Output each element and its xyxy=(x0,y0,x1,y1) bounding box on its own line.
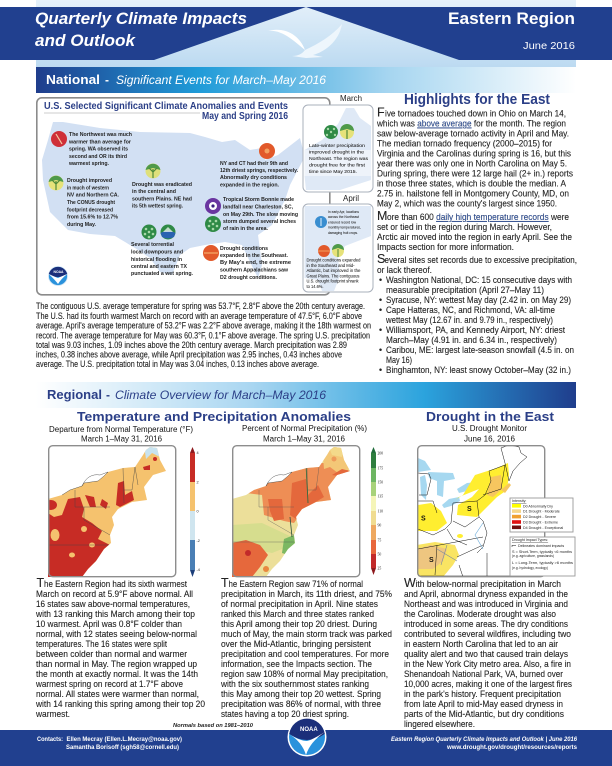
section bar: national: Significant Events for March–May 2016 xyxy=(116,73,326,87)
footer contacts: Contacts: xyxy=(37,737,63,743)
bullet list: record sites: measurable precipitation (April 27–May 11) xyxy=(386,285,544,295)
legend: precipitation colour bar: 25 xyxy=(378,566,381,570)
text block: drought narrative: lingered elsewhere. xyxy=(404,719,475,729)
text block: highlights: set or tied in the region during March. However, xyxy=(377,222,552,232)
callout: Tropical Storm Bonnie: on May 29th. The slow moving xyxy=(223,212,298,218)
text: April cold xyxy=(328,210,361,235)
text block: national summary: The U.S. had its fourth warmest March on record with an average temperature of 47.5°F, 6.0°F above xyxy=(36,311,362,321)
footer publication line xyxy=(391,737,578,751)
header background xyxy=(0,0,612,67)
legend: temperature colour bar: -2 xyxy=(196,539,200,543)
map: U.S. drought monitor: S xyxy=(429,557,434,564)
text block: highlights: ore than 600 daily high temperature records were xyxy=(387,212,569,222)
callout: western drought: The CONUS drought xyxy=(67,200,115,206)
text: April cold: ensured record low xyxy=(328,220,356,224)
icon: drought improved xyxy=(48,176,64,190)
callout: Texas: local downpours and xyxy=(131,250,183,256)
callout: central plains: in the central and xyxy=(132,189,176,195)
legend: drought impact types: L = Long-Term, typically >6 months xyxy=(512,561,573,565)
text block: drought narrative: introduced in some areas. The dry conditions xyxy=(404,619,569,629)
section bar: national: National xyxy=(46,72,100,87)
legend: temperature colour bar: 0 xyxy=(196,510,199,514)
legend: temperature colour bar: 4 xyxy=(196,451,199,455)
text: April drought: to 14.6%. xyxy=(306,284,324,289)
text block: temperature narrative: the month at exactly normal. It was the 14th xyxy=(36,669,198,679)
text block: drought narrative: W xyxy=(404,576,416,590)
text block: highlights: S xyxy=(377,252,385,266)
text block: drought narrative: 10,000 acres, making it one of the largest fires xyxy=(404,679,573,689)
legend: drought impact types: S = Short-Term, typically <6 months xyxy=(512,550,572,554)
map caption: temperature: Departure from Normal Temperature (°F) xyxy=(49,425,193,434)
section bar: national: - xyxy=(105,73,109,87)
bullet list: record sites: • xyxy=(379,295,382,305)
callout: central plains: southern Plains. NE had xyxy=(132,196,192,202)
text: March summary: drought free for the first xyxy=(309,162,366,168)
legend: temperature colour bar: -4 xyxy=(196,568,200,572)
text block: highlights: which was above average for the month. The region xyxy=(376,118,566,128)
map caption: drought: June 16, 2016 xyxy=(464,434,516,444)
map: U.S. drought monitor xyxy=(417,445,545,577)
text block: precipitation narrative: this April among their top 20 driest. During xyxy=(221,619,377,629)
label: April: April xyxy=(343,194,359,203)
bullet list: record sites: • xyxy=(379,305,382,315)
callout: central plains: its 5th wettest spring. xyxy=(132,204,183,210)
text block: precipitation narrative: precipitation was 86% of normal, with three xyxy=(221,699,381,709)
text block: temperature narrative: normal. All states were warmer than normal, xyxy=(36,689,199,699)
callout: Texas: central and eastern TX xyxy=(131,264,187,270)
legend: drought impact types: (e.g. agriculture, grasslands) xyxy=(512,554,554,558)
text block: national summary: average. April's average temperature of 53.2°F was 2.2°F above average, making it the 18th warmest on xyxy=(36,321,371,331)
callout: central plains: Drought was eradicated xyxy=(132,182,192,188)
text block: temperature narrative: warmest spring on record at 1.7°F above xyxy=(35,679,183,689)
icon: heavy rain xyxy=(142,224,156,240)
map: U.S. drought monitor: S xyxy=(467,506,472,513)
text block: temperature narrative: he Eastern Region had its sixth warmest xyxy=(44,579,187,589)
title: Quarterly Climate Impacts xyxy=(35,10,247,28)
legend: drought impact types: Drought Impact Types: xyxy=(512,538,548,542)
icon: flooding xyxy=(160,224,176,240)
text block: temperature narrative: warmest. xyxy=(35,709,70,719)
panel heading: May and Spring 2016 xyxy=(202,110,288,122)
map caption: drought: U.S. Drought Monitor xyxy=(452,424,527,433)
text: April drought: Atlantic, but improved in the xyxy=(306,268,361,273)
text block: drought narrative: quality alert and two that caused train delays xyxy=(404,649,569,659)
icon: drought eradicated xyxy=(146,164,160,178)
callout: Southeast drought: D2 drought conditions. xyxy=(220,275,277,281)
bullet list: record sites: • xyxy=(379,345,382,355)
legend: drought intensity: D3 Drought - Extreme xyxy=(523,521,558,525)
icon: NOAA logo xyxy=(48,266,68,286)
text: April cold: monthly temperatures, xyxy=(328,226,361,230)
callout: western drought: NV and Northern CA. xyxy=(67,193,119,199)
text block: precipitation narrative xyxy=(220,576,392,719)
callout: Tropical Storm Bonnie: storm dumped several inches xyxy=(223,219,296,225)
text block: highlights: F xyxy=(377,106,385,120)
text block: precipitation narrative: information, see the Impacts section. The xyxy=(221,659,372,669)
section bar: regional: Climate Overview for March–May 2016 xyxy=(115,388,326,402)
note: normals: Normals based on 1981–2010 xyxy=(173,723,254,729)
legend: temperature colour bar xyxy=(190,447,200,577)
icon: NOAA footer logo: NOAA xyxy=(300,727,318,733)
legend: precipitation colour bar xyxy=(371,447,383,575)
bullet list: record sites: Caribou, ME: largest late-season snowfall (4.5 in. on xyxy=(386,345,574,355)
bullet list: record sites: • xyxy=(379,275,382,285)
footer publication line: www.drought.gov/drought/resources/reports xyxy=(446,745,578,751)
text block: precipitation narrative: precipitation and cool temperatures. For more xyxy=(221,649,389,659)
legend: precipitation colour bar: 75 xyxy=(378,538,381,542)
legend: drought impact types: (e.g. hydrology, ecology) xyxy=(512,566,548,570)
text: April drought: Drought conditions expanded xyxy=(306,258,361,262)
text: April cold: In early Apr, locations xyxy=(328,210,359,214)
text: April drought: Great Plains. The contiguous xyxy=(306,273,360,278)
callout: Southeast drought: Drought conditions xyxy=(220,246,268,252)
callout: Northwest: The Northwest was much xyxy=(69,132,132,138)
text block: temperature narrative: 10 warmest. April was 0.8°F colder than xyxy=(36,619,182,629)
inset panel: March xyxy=(303,105,373,192)
text block: precipitation narrative: over the Mid-Atlantic, bringing persistent xyxy=(221,639,372,649)
callout: Southeast drought xyxy=(220,246,291,281)
text: April drought xyxy=(306,258,361,289)
legend: precipitation colour bar: 150 xyxy=(378,480,383,484)
legend: precipitation colour bar: 110 xyxy=(378,510,383,514)
icon: heat xyxy=(51,131,67,147)
bullet list: record sites xyxy=(379,275,574,375)
text: March summary xyxy=(309,143,369,175)
bullet list: record sites: Binghamton, NY: least snowy October–May (32 in.) xyxy=(386,365,571,375)
bullet list: record sites: Cape Hatteras, NC, and Richmond, VA: all-time xyxy=(386,305,555,315)
text block: drought narrative: parts of the Mid-Atlantic, but dry conditions xyxy=(404,709,565,719)
text block: drought narrative: ith below-normal precipitation in March xyxy=(416,579,561,589)
icon: precipitation xyxy=(324,125,338,139)
text block: drought narrative xyxy=(404,576,573,729)
panel heading: U.S. Selected Significant Climate Anomalies and Events xyxy=(44,100,288,112)
callout: Northwest: spring. WA observed its xyxy=(69,147,128,153)
legend: drought intensity: D1 Drought - Moderate xyxy=(523,510,560,514)
text block: drought narrative: in the park's history. Frequent precipitation xyxy=(404,689,561,699)
title xyxy=(35,10,247,50)
map: temperature departure xyxy=(45,445,176,577)
callout: Texas xyxy=(131,242,193,277)
region name and date xyxy=(448,10,575,52)
bullet list: record sites: May 16) xyxy=(386,355,412,365)
callout: Tropical Storm Bonnie xyxy=(223,197,298,232)
legend: drought intensity xyxy=(510,498,573,532)
text block: highlights: The median tornado frequency (2000–2015) for xyxy=(377,138,552,148)
text block: temperature narrative: March on record at 5.9°F above normal. All xyxy=(36,589,193,599)
legend: drought intensity: D0 Abnormally Dry xyxy=(523,504,553,508)
text block: temperature narrative: 16 states saw above-normal temperatures, xyxy=(36,599,190,609)
text: March summary: improved drought in the xyxy=(309,150,364,156)
legend: precipitation colour bar: 175 xyxy=(378,466,383,470)
text block: temperature narrative: T xyxy=(36,576,44,590)
text block: drought narrative: Shenandoah National Park, VA, burned over xyxy=(404,669,563,679)
text block: highlights xyxy=(376,106,577,375)
label: March: March xyxy=(340,94,362,103)
text block: highlights: Virginia and the Carolinas during spring is 16, but this xyxy=(377,148,572,158)
text block: highlights: saw below-average tornado activity in April and May. xyxy=(377,128,569,138)
footer publication line: Eastern Region Quarterly Climate Impacts and Outlook | June 2016 xyxy=(391,737,578,743)
text: April drought: U.S. drought footprint shrank xyxy=(306,279,359,284)
callout: western drought: Drought improved xyxy=(67,178,112,184)
bullet list: record sites: March–May (4.91 in. and 6.34 in., respectively) xyxy=(386,335,557,345)
text block: highlights: in those three states, which is double the median. A xyxy=(377,178,566,188)
callout: Northwest: second and OR its third xyxy=(69,154,127,160)
text block: temperature narrative: with 14 ranking this spring among their top 20 xyxy=(35,699,205,709)
callout: NY and CT: Abnormally dry conditions xyxy=(220,175,287,181)
callout: Texas: Several torrential xyxy=(131,242,174,248)
bullet list: record sites: Washington National, DC: 15 consecutive days with xyxy=(386,275,572,285)
callout: western drought: from 15.6% to 12.7% xyxy=(67,215,118,221)
text block: precipitation narrative: states having a top 20 driest spring. xyxy=(221,709,349,719)
text block: highlights: Arctic air moved into the region in early April. See the xyxy=(377,232,572,242)
text block: national summary: The contiguous U.S. average temperature for spring was 53.7°F, 2.8°F above the 20th century average. xyxy=(36,301,365,311)
text block: temperature narrative xyxy=(35,576,205,719)
region name and date: Eastern Region xyxy=(448,10,575,28)
legend: precipitation colour bar: 50 xyxy=(378,552,381,556)
text block: precipitation narrative: T xyxy=(221,576,229,590)
text block: temperature narrative: than normal in May. The region wrapped up xyxy=(36,659,197,669)
icon: drought improved xyxy=(332,244,344,257)
footer band xyxy=(0,730,612,766)
panel: U.S. selected significant climate anomalies xyxy=(37,98,330,295)
legend: temperature colour bar: 2 xyxy=(196,480,199,484)
text block: highlights: May 2, which was the county's largest since 1950. xyxy=(377,198,557,208)
inset panel: April xyxy=(303,204,373,292)
callout: central plains xyxy=(132,182,192,210)
text block: highlights: year there was only one in North Carolina on May 5. xyxy=(377,158,567,168)
map caption: precipitation: Percent of Normal Precipitation (%) xyxy=(242,424,367,433)
callout: NY and CT: expanded in the region. xyxy=(220,182,279,188)
callout: Tropical Storm Bonnie: landfall near Charleston, SC, xyxy=(223,205,293,211)
text block: temperature narrative: temperatures. The 16 states were split xyxy=(36,639,167,649)
icon: drought improved xyxy=(340,124,354,139)
text block: national summary: total was 9.03 inches, 1.09 inches above the 20th century average. March precipitation was 2.89 xyxy=(36,340,347,350)
text block: precipitation narrative: he Eastern Region saw 71% of normal xyxy=(228,579,363,589)
callout: Northwest: warmer than average for xyxy=(68,139,132,145)
map caption: temperature xyxy=(49,425,193,444)
text block: precipitation narrative: with the six southernmost states ranking xyxy=(220,679,369,689)
text block: highlights: During spring, there were 12 large hail (2+ in.) reports xyxy=(377,168,574,178)
text block: drought narrative: from late April to mid-May eased dryness in xyxy=(404,699,563,709)
callout: western drought xyxy=(67,178,119,228)
text block: temperature narrative: between colder than normal and warmer xyxy=(36,649,187,659)
bullet list: record sites: wettest May (12.67 in. and 9.79 in., respectively) xyxy=(385,315,553,325)
legend: drought intensity: D4 Drought - Exceptional xyxy=(523,526,563,530)
text block: highlights: ive tornadoes touched down in Ohio on March 14, xyxy=(385,108,566,118)
heading: drought in the east: Drought in the East xyxy=(426,409,555,424)
panel heading xyxy=(44,100,288,122)
callout: Tropical Storm Bonnie: of rain in the area. xyxy=(223,226,268,232)
text block: national summary: inches, 0.38 inches above average, while April precipitation was 2.95 inches, 0.43 inches above xyxy=(36,349,342,359)
legend: precipitation colour bar: 90 xyxy=(378,524,381,528)
callout: Northwest xyxy=(68,132,132,167)
legend: drought impact types xyxy=(510,537,575,576)
legend: precipitation colour bar: 135 xyxy=(378,494,383,498)
text: March summary: Late-winter precipitation xyxy=(309,143,365,149)
map: percent of normal precipitation xyxy=(232,445,360,577)
title: and Outlook xyxy=(35,32,136,50)
text block: precipitation narrative: precipitation in March, its 11th driest, and 75% xyxy=(221,589,392,599)
callout: NY and CT: 12th driest springs, respectively. xyxy=(220,168,298,174)
footer contacts xyxy=(37,737,182,751)
section bar: regional xyxy=(36,382,576,408)
text block: precipitation narrative: region saw 108% of normal May precipitation, xyxy=(221,669,388,679)
section bar: regional: - xyxy=(106,388,110,402)
icon: dry northeast xyxy=(259,143,275,159)
text: April cold: across the Northeast xyxy=(328,215,360,219)
icon: heavy rain southeast xyxy=(205,216,221,232)
icon: NOAA logo: NOAA xyxy=(54,270,64,274)
text block: drought narrative: Northeast and was introduced in Virginia and xyxy=(404,599,568,609)
text block: drought narrative: the Carolinas. Moderate drought was also xyxy=(404,609,556,619)
bullet list: record sites: • xyxy=(379,365,382,375)
callout: Texas: punctuated a wet spring. xyxy=(131,271,193,277)
text block: precipitation narrative: ranked this March and three states ranked xyxy=(221,609,374,619)
text block: highlights: everal sites set records due to excessive precipitation, xyxy=(384,255,577,265)
callout: Texas: historical flooding in xyxy=(131,257,182,263)
text block: precipitation narrative: much of May, the main storm track was parked xyxy=(221,629,392,639)
map caption: precipitation: March 1–May 31, 2016 xyxy=(263,434,346,444)
callout: NY and CT xyxy=(220,161,298,188)
map caption: temperature: March 1–May 31, 2016 xyxy=(81,434,163,444)
text block: temperature narrative: with 13 ranking this March among their top xyxy=(35,609,195,619)
callout: NY and CT: NY and CT had their 9th and xyxy=(220,161,288,167)
region name and date: June 2016 xyxy=(523,40,575,52)
icon: NOAA footer logo xyxy=(288,718,326,756)
text: April drought: in the Southeast and Mid- xyxy=(306,263,355,268)
text block: precipitation narrative: this May among their top 20 wettest. Spring xyxy=(221,689,381,699)
text block: highlights: 2.75 in. hailstone fell in Montgomery County, MD, on xyxy=(377,188,569,198)
map caption: precipitation xyxy=(242,424,367,444)
text block: highlights: or lack thereof. xyxy=(377,265,432,275)
U.S. map background xyxy=(42,122,303,278)
text block: drought narrative: contributed to several wildfires, including two xyxy=(404,629,571,639)
text: March summary: Northeast. The region was xyxy=(309,156,369,162)
bullet list: record sites: Syracuse, NY: wettest May day (2.42 in. on May 29) xyxy=(386,295,571,305)
callout: Tropical Storm Bonnie: Tropical Storm Bonnie made xyxy=(223,197,294,203)
icon: tropical storm xyxy=(205,198,221,214)
section bar: national xyxy=(36,67,576,93)
legend: precipitation colour bar: 200 xyxy=(378,452,383,456)
legend: drought impact types: Delineates dominant impacts xyxy=(518,544,564,548)
callout: Southeast drought: By May's end, the extreme xyxy=(220,260,291,266)
legend: drought intensity: Intensity: xyxy=(512,499,526,503)
text block: drought narrative: and April, abnormal dryness expanded in the xyxy=(404,589,568,599)
text block: temperature narrative: normal, with 12 states seeing below-normal xyxy=(36,629,197,639)
heading: temperature and precipitation anomalies: Temperature and Precipitation Anomalies xyxy=(77,409,351,424)
callout: Northwest: warmest spring. xyxy=(68,161,109,167)
text block: highlights: Impacts section for more information. xyxy=(377,242,514,252)
text block: precipitation narrative: of normal precipitation in April. Nine states xyxy=(221,599,379,609)
text block: drought narrative: in eastern North Carolina that led to an air xyxy=(404,639,558,649)
icon: cold xyxy=(315,216,327,228)
text block: highlights: M xyxy=(377,209,387,223)
footer contacts: Ellen Mecray (Ellen.L.Mecray@noaa.gov) xyxy=(66,737,182,743)
callout: Southeast drought: southern Appalachians saw xyxy=(220,268,289,274)
bullet list: record sites: Williamsport, PA, and Kennedy Airport, NY: driest xyxy=(386,325,566,335)
section bar: regional: Regional xyxy=(47,387,102,402)
heading: highlights: Highlights for the East xyxy=(404,91,550,108)
callout: western drought: in much of western xyxy=(67,185,109,191)
legend: drought intensity: D2 Drought - Severe xyxy=(523,515,556,519)
callout: western drought: during May. xyxy=(67,222,96,228)
footer contacts: Samantha Borisoff (sgh58@cornell.edu) xyxy=(66,745,179,751)
text block: national summary xyxy=(36,301,371,369)
text: April cold: damaging fruit crops. xyxy=(328,231,358,235)
callout: western drought: footprint decreased xyxy=(67,207,113,213)
text block: drought narrative: in the New York City metro area. Also, a fire in xyxy=(404,659,571,669)
text block: national summary: record. The average temperature for May was 60.3°F, 0.1°F above average. The spring U.S. precipitation xyxy=(36,330,370,340)
icon: drought expanded xyxy=(318,245,330,257)
map: U.S. drought monitor: S xyxy=(421,516,426,522)
icon: drought southeast xyxy=(203,245,219,261)
bullet list: record sites: • xyxy=(379,325,382,335)
text: March summary: time since May 2015. xyxy=(309,169,357,175)
text block: national summary: average. The U.S. precipitation total in May was 3.04 inches, 0.13 inches above average. xyxy=(36,359,319,369)
map caption: drought xyxy=(452,424,527,444)
callout: Southeast drought: expanded in the Southeast. xyxy=(220,253,288,259)
